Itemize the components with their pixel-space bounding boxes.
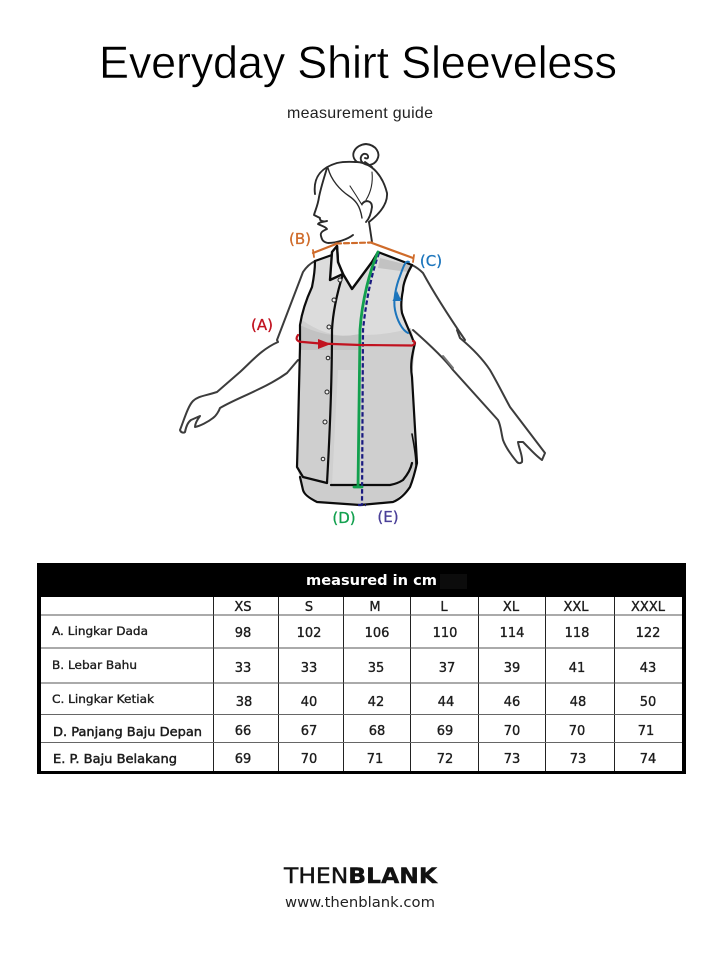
table header text: measured in cm [306,573,437,589]
row values: 38 [236,695,252,710]
row values: 74 [640,752,656,767]
row labels: E. P. Baju Belakang [53,751,177,766]
size header row: XL [503,600,520,615]
label E: (E) [377,508,399,526]
size header row: XXL [563,600,589,615]
shirt buttons [321,278,342,461]
head and hair [314,144,387,243]
row labels: D. Panjang Baju Depan [53,724,202,739]
row values: 66 [235,724,251,739]
row values: 114 [500,626,524,641]
row values: 67 [301,724,317,739]
row values: 70 [569,724,585,739]
row values: 33 [301,661,317,676]
size header row [234,600,666,615]
figure illustration [180,144,545,505]
measurement D: front length [354,252,378,487]
row values: 69 [437,724,453,739]
row values: 50 [640,695,656,710]
label A: (A) [251,316,273,334]
row values: 122 [636,626,660,641]
measurement E: back length [358,253,379,505]
row values: 71 [367,752,383,767]
row values: 73 [570,752,586,767]
row values: 40 [301,695,317,710]
row values: 42 [368,695,384,710]
label B: (B) [289,230,311,248]
size header row: L [440,600,448,615]
row values: 35 [368,661,384,676]
shirt outlines [297,252,417,505]
table grid [41,597,682,771]
row values: 70 [301,752,317,767]
label D: (D) [332,509,356,527]
collar [330,246,378,289]
row values: 72 [437,752,453,767]
row values: 46 [504,695,520,710]
row values: 68 [369,724,385,739]
row values: 33 [235,661,251,676]
size table [37,563,686,774]
row values: 70 [504,724,520,739]
size header row: XXXL [631,600,666,615]
table frame and header band [37,563,686,774]
row values: 118 [565,626,589,641]
title: Everyday Shirt Sleeveless [99,37,617,88]
website url: www.thenblank.com [285,895,435,911]
row values: 73 [504,752,520,767]
measurement B: shoulder width [313,242,414,262]
label C: (C) [420,252,442,270]
subtitle: measurement guide [287,105,433,122]
row values: 98 [235,626,251,641]
measurement A: chest [297,335,415,349]
size header row: XS [234,600,252,615]
row values: 48 [570,695,586,710]
row labels: C. Lingkar Ketiak [52,692,154,706]
row values: 71 [638,724,654,739]
row values: 39 [504,661,520,676]
row values: 44 [438,695,454,710]
row values: 102 [297,626,321,641]
arms [180,261,545,463]
row labels: A. Lingkar Dada [52,624,148,638]
row values: 37 [439,661,455,676]
row labels: B. Lebar Bahu [52,658,137,672]
row values: 110 [433,626,457,641]
row values: 43 [640,661,656,676]
shirt body fill [297,252,417,505]
brand logo: THEN BLANK [283,864,438,888]
row labels [52,624,202,766]
size header row: M [369,600,381,615]
row values [235,626,660,767]
measurement labels [251,230,442,527]
row values: 41 [569,661,585,676]
measurement C: armhole [392,262,409,333]
row values: 69 [235,752,251,767]
size header row: S [305,600,313,615]
row values: 106 [365,626,389,641]
